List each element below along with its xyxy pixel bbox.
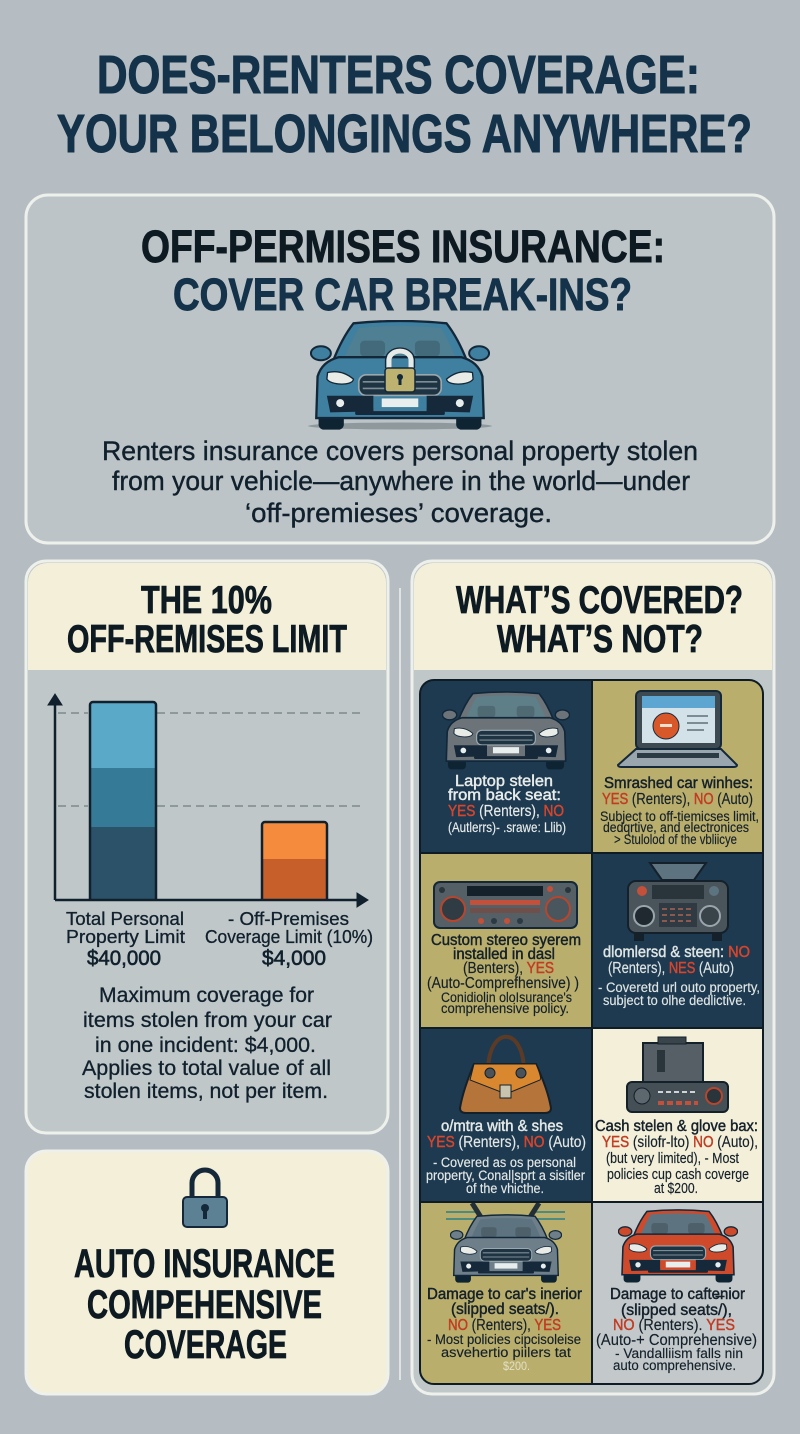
panel heading: covered: WHAT’S NOT? [497,618,703,661]
icon: car stereo [434,882,577,928]
cell text [596,1286,757,1373]
cell: smashed car windows [592,680,763,853]
cell: gym bag with shoes [420,1028,592,1202]
cell text: policies cup cash coverge [607,1167,749,1183]
cell text: Damage to cafte̶nior [610,1286,745,1303]
cell text [427,1286,582,1373]
cell text: o/mtra with & shes [441,1118,563,1135]
cell text: Smrashed car winhes: [604,775,753,792]
panel: what's covered, what's not [412,561,774,1394]
cell text: NO (Renters), YES [448,1317,561,1334]
cell text: installed in dasl [453,946,555,963]
cell text: YES (Renters), NO (Auto) [602,791,753,808]
panel: auto insurance comprehensive coverage [26,1151,388,1394]
panel heading: off-premises [141,221,665,320]
cell text: Cash stelen & glove bax: [595,1118,758,1135]
panel: off-premises insurance [26,195,774,543]
text: maximum coverage note [82,984,332,1103]
icon: laptop [618,691,737,767]
cell text [598,944,760,1008]
panel heading: off-premises: OFF-PERMISES INSURANCE: [141,221,665,272]
text: maximum coverage note: Applies to total value of all [82,1057,331,1080]
grid frame [420,680,763,1384]
cell text: comprehensive policy. [441,1001,569,1016]
text: maximum coverage note: in one incident: $4,000. [95,1034,316,1057]
icon: dash unit [628,863,728,941]
panel heading: off-premises: COVER CAR BREAK-INS? [173,269,632,320]
panel heading: 10% limit: OFF-REMISES LIMIT [67,618,347,661]
bar labels: Property Limit [66,927,185,947]
cell: dismantled and stolen [592,853,763,1028]
cell text: Conidiolin oloIsurance's [441,990,572,1005]
icon: glove box and radio [627,1037,728,1112]
cell text: Custom stereo syerem [431,932,581,949]
cell text: at $200. [654,1181,698,1197]
icon: padlock [183,1170,227,1227]
cell text: - Coveretd url outo property, [598,980,760,995]
cell text [595,1118,758,1197]
cell text: of the vhicthe. [466,1181,544,1196]
cell text: (but very limited), - Most [606,1151,739,1167]
cell text: NO (Renters). YES [613,1317,735,1334]
cell text: dlomlersd & steen: NO [603,944,750,961]
text: off-premises description: ‘off-premieses’ coverage. [245,498,552,528]
cell text: - Most policies cipcisoleise [427,1332,581,1347]
text: off-premises description: from your vehicle—anywhere in the world—under [112,466,690,496]
cell text [426,1118,586,1196]
cell: cash stolen from glove box [592,1028,763,1202]
panel heading: auto comprehensive: COMPEHENSIVE [87,1283,322,1327]
text: off-premises description: Renters insurance covers personal property stolen [102,436,698,466]
cell text: (Auto-+ Comprehensive) [596,1332,757,1349]
axes [48,694,368,907]
bar labels: - Off-Premises [228,909,349,929]
panel heading: 10% limit [67,579,347,661]
cell: damage to car's exterior [592,1202,763,1384]
cell text: (slipped seats/), [621,1302,732,1319]
cell text: $200. [503,1359,530,1373]
icon: handbag [460,1037,551,1113]
panel: the 10% off-premises limit [26,561,388,1133]
cell text: asvehertio piilers tat [441,1345,571,1360]
cell text: (Autlerrs)- .srawe: Llib) [448,819,566,835]
cell: laptop stolen from back seat [420,680,592,853]
cell text: (Renters), NES (Auto) [608,960,734,977]
cell text: subject to olhe dedlictive. [603,993,746,1008]
bar labels: $4,000 [262,947,326,970]
cell text: from back seat: [448,787,561,804]
cell text [600,775,759,847]
panel heading: auto comprehensive: COVERAGE [124,1323,287,1367]
text: maximum coverage note: Maximum coverage for [99,984,314,1007]
cell text [427,932,581,1016]
bar labels: Total Personal [66,909,184,929]
cell: damage to car's interior [420,1202,592,1384]
cell text: YES (Renters), NO [448,803,564,820]
bar: total personal property [90,702,156,900]
icon: red car [618,1210,738,1283]
bar labels: $40,000 [87,947,161,970]
bar: off-premises limit [262,822,327,900]
panel heading: 10% limit: THE 10% [141,579,272,622]
text: off-premises description [102,436,698,528]
text: maximum coverage note: items stolen from your car [83,1009,332,1032]
bar labels [66,909,373,970]
cell text: - Vandalliism falls nin [615,1346,743,1361]
cell text: (slipped seats/). [451,1301,559,1318]
text: maximum coverage note: stolen items, not per item. [84,1080,328,1103]
cell text: Laptop stelen [455,773,553,790]
cell text: dedqrtive, and electronices [603,820,749,835]
icon: grey-blue car with open doors [446,1203,565,1283]
cell text: Subject to off-tiemicses limit, [600,809,759,824]
bar chart: personal property vs off-premises limit [48,694,373,970]
cell text: (Auto-Comprefhensive) ) [427,975,579,992]
cell text: Damage to car's inerior [427,1286,582,1303]
cell text: YES (silofr-lto) NO (Auto), [602,1134,758,1151]
cell text: (Benters), YES [463,960,554,977]
title [57,45,752,164]
cell: custom stereo system [420,853,592,1028]
cell text [448,773,566,835]
panel heading: auto comprehensive [74,1242,335,1367]
cell text: property, Conal|sprt a sisitler [426,1168,585,1183]
icon: locked blue car [308,321,492,430]
panel heading: auto comprehensive: AUTO INSURANCE [74,1242,335,1286]
cell text: YES (Renters), NO (Auto) [427,1134,586,1151]
bar labels: Coverage Limit (10%) [205,927,373,947]
icon: grey car [442,692,570,769]
cell text: > Stulolod of the vbliicye [614,832,737,847]
cell text: auto comprehensive. [613,1358,736,1373]
cell text: - Covered as os personal [433,1155,576,1170]
panel heading: covered [456,579,743,661]
